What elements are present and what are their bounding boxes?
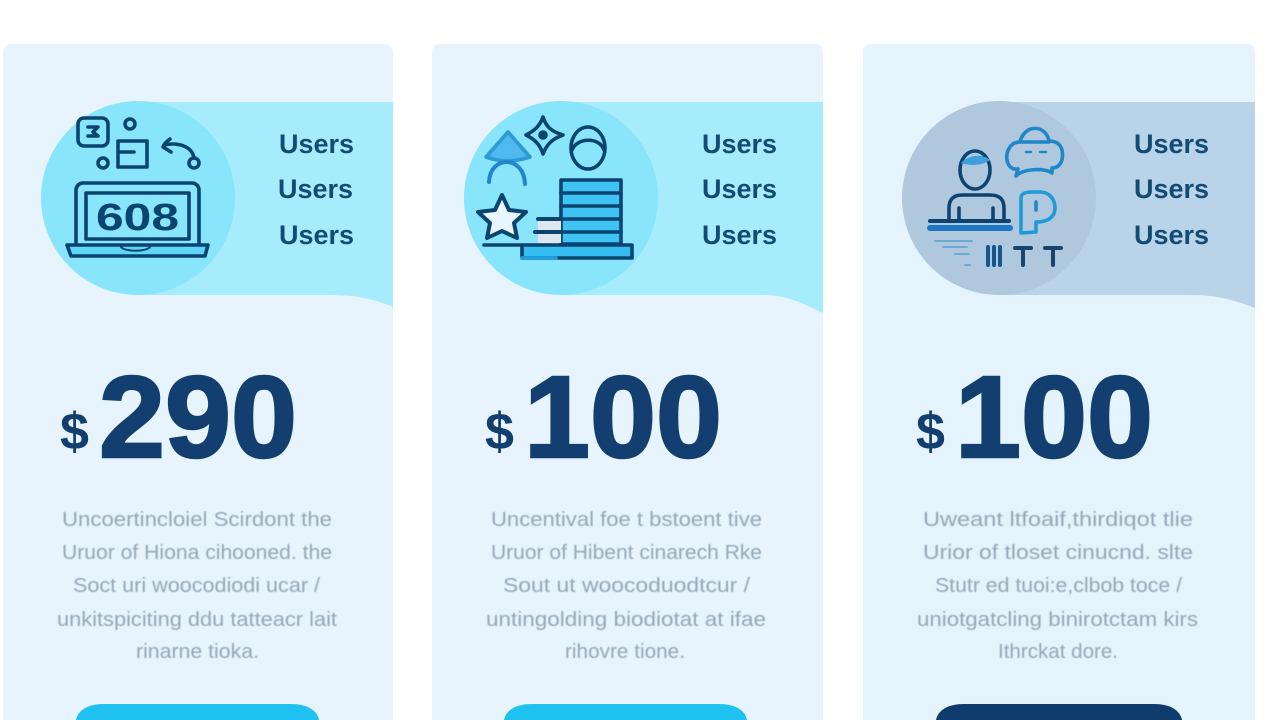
icon: building, star and hat (478, 117, 632, 258)
feature labels: Users (702, 174, 777, 204)
description: uniotgatcling binirotctam kirs (917, 609, 1198, 631)
icon: laptop and apps: 608 (96, 197, 179, 239)
card background (3, 44, 393, 720)
description: Ithrckat dore. (998, 641, 1118, 663)
feature labels (278, 129, 354, 250)
description: Uruor of Hiona cihooned. the (62, 542, 332, 564)
header band (999, 102, 1255, 308)
description: Urior of tloset cinucnd. slte (923, 542, 1193, 564)
icon: laptop and apps (67, 118, 208, 256)
price: $ (60, 403, 89, 461)
price: $ (485, 403, 514, 461)
price: 100 (524, 352, 722, 482)
button (504, 704, 747, 720)
price: $ (916, 403, 945, 461)
description (57, 509, 337, 663)
button (76, 704, 319, 720)
description: Uruor of Hibent cinarech Rke (491, 542, 762, 564)
panel: plan card 3 (863, 44, 1255, 720)
feature labels: Users (278, 174, 353, 204)
feature labels: Users (279, 129, 354, 159)
feature labels: Users (702, 129, 777, 159)
feature labels (702, 129, 777, 250)
description: Soct uri woocodiodi ucar / (73, 575, 320, 597)
feature labels (1134, 129, 1209, 250)
description: rihovre tione. (565, 641, 685, 663)
card background (863, 44, 1255, 720)
description: untingolding biodiotat at ifae (486, 609, 766, 631)
description (486, 509, 766, 663)
feature labels: Users (1134, 174, 1209, 204)
description (917, 509, 1198, 663)
header band (561, 102, 823, 313)
icon circle (464, 101, 658, 295)
icon: person at desk with chat (930, 128, 1063, 265)
icon circle (41, 101, 235, 295)
panel: plan card 1 (3, 44, 393, 720)
icon circle (902, 101, 1096, 295)
button (936, 704, 1182, 720)
price: 100 (955, 352, 1153, 482)
description: rinarne tioka. (136, 641, 259, 663)
card background (432, 44, 823, 720)
price: 290 (99, 352, 297, 482)
description: Uweant ltfoaif,thirdiqot tlie (923, 509, 1193, 531)
description: Stutr ed tuoi:e,clbob toce / (935, 575, 1182, 597)
feature labels: Users (1134, 129, 1209, 159)
description: Sout ut woocoduodtcur / (503, 575, 750, 597)
feature labels: Users (1134, 220, 1209, 250)
panel: plan card 2 (432, 44, 823, 720)
feature labels: Users (279, 220, 354, 250)
description: unkitspiciting ddu tatteacr lait (57, 609, 337, 631)
description: Uncoertincloiel Scirdont the (62, 509, 332, 531)
header band (138, 102, 393, 307)
feature labels: Users (702, 220, 777, 250)
description: Uncentival foe t bstoent tive (491, 509, 762, 531)
